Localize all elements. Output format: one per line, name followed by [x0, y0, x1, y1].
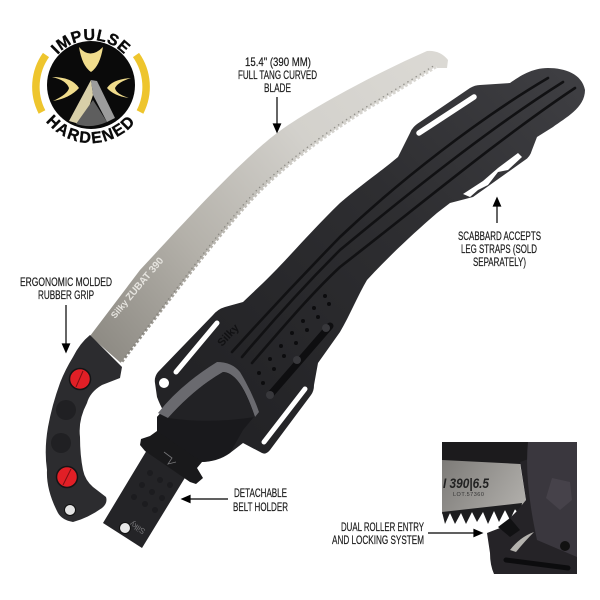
badge: impulse hardened	[32, 28, 150, 144]
arrow: roller	[428, 530, 482, 536]
arrow: belt holder	[182, 496, 228, 502]
belt holder texture	[131, 470, 173, 513]
belt holder plate	[103, 450, 186, 548]
inset blade	[442, 460, 526, 514]
rivet dots	[257, 294, 331, 385]
scabbard rail with screws	[266, 324, 330, 399]
handle dimple bottom	[51, 433, 71, 453]
label: roller	[332, 520, 424, 547]
inset silver ramp	[510, 532, 534, 552]
label: grip: ERGONOMIC MOLDED	[20, 275, 112, 289]
label: blade: FULL TANG CURVED	[238, 68, 317, 82]
label: grip: RUBBER GRIP	[38, 288, 94, 302]
blade body	[90, 51, 448, 364]
badge crescents	[52, 47, 131, 101]
belt holder	[103, 431, 203, 548]
label: blade: 15.4" (390 MM)	[245, 55, 311, 69]
throat black face	[168, 372, 255, 421]
badge text top: IMPULSE	[50, 28, 131, 54]
inset dark top	[442, 442, 532, 464]
left mount hole	[159, 378, 169, 388]
badge text bottom: HARDENED	[46, 114, 133, 144]
saw blade	[90, 51, 448, 364]
hinge latch	[164, 452, 176, 464]
label: blade	[238, 55, 317, 95]
label: blade: BLADE	[264, 81, 291, 95]
handle lanyard hole	[64, 504, 76, 516]
badge black disc	[47, 41, 135, 129]
inset cover	[527, 442, 577, 557]
arrow: blade	[274, 97, 280, 132]
scabbard logo: Silky	[215, 321, 242, 349]
leg strap notched slot	[463, 153, 522, 197]
belt holder hole	[120, 522, 130, 534]
left mount slot	[176, 323, 217, 372]
label: belt holder: BELT HOLDER	[233, 500, 288, 514]
belt holder hinge	[140, 431, 203, 484]
inset slot	[506, 560, 568, 568]
upper strap slot	[419, 97, 474, 133]
inset cover logo	[546, 478, 572, 510]
scabbard ribs	[232, 78, 575, 363]
scabbard dark lower throat	[157, 362, 258, 462]
handle dimple top	[56, 400, 76, 420]
inset body	[487, 442, 577, 574]
label: roller: AND LOCKING SYSTEM	[332, 533, 424, 547]
label: leg straps: SCABBARD ACCEPTS	[458, 229, 541, 243]
scabbard	[155, 68, 585, 462]
label: roller: DUAL ROLLER ENTRY	[341, 520, 424, 534]
inset photo: dual roller	[442, 442, 577, 574]
badge yellow side arcs	[36, 55, 146, 112]
label: leg straps	[458, 229, 541, 269]
label: leg straps: LEG STRAPS (SOLD	[461, 242, 537, 256]
arrow: grip	[62, 305, 70, 352]
blade teeth	[122, 68, 437, 364]
scabbard body	[155, 68, 585, 462]
inset lot number: LOT.57360	[453, 492, 484, 498]
label: belt holder	[233, 486, 288, 514]
handle red screw top	[70, 368, 90, 390]
badge blade triangle	[69, 80, 115, 126]
handle grip	[46, 335, 122, 522]
throat grey chevron	[158, 362, 259, 418]
inset screw	[560, 541, 570, 551]
label: grip	[20, 275, 112, 302]
saw handle	[46, 335, 122, 522]
inset roller	[498, 518, 520, 537]
label: leg straps: SEPARATELY)	[473, 255, 526, 269]
handle red screw bottom	[56, 466, 78, 488]
arrow: leg straps	[494, 198, 500, 223]
label: belt holder: DETACHABLE	[234, 486, 287, 500]
inset print: I 390|6.5	[443, 475, 489, 491]
blade print: Silky ZUBAT 390	[109, 255, 167, 321]
belt holder logo: Silky	[128, 519, 147, 536]
right mount slot	[264, 389, 305, 442]
inset teeth	[442, 503, 522, 524]
